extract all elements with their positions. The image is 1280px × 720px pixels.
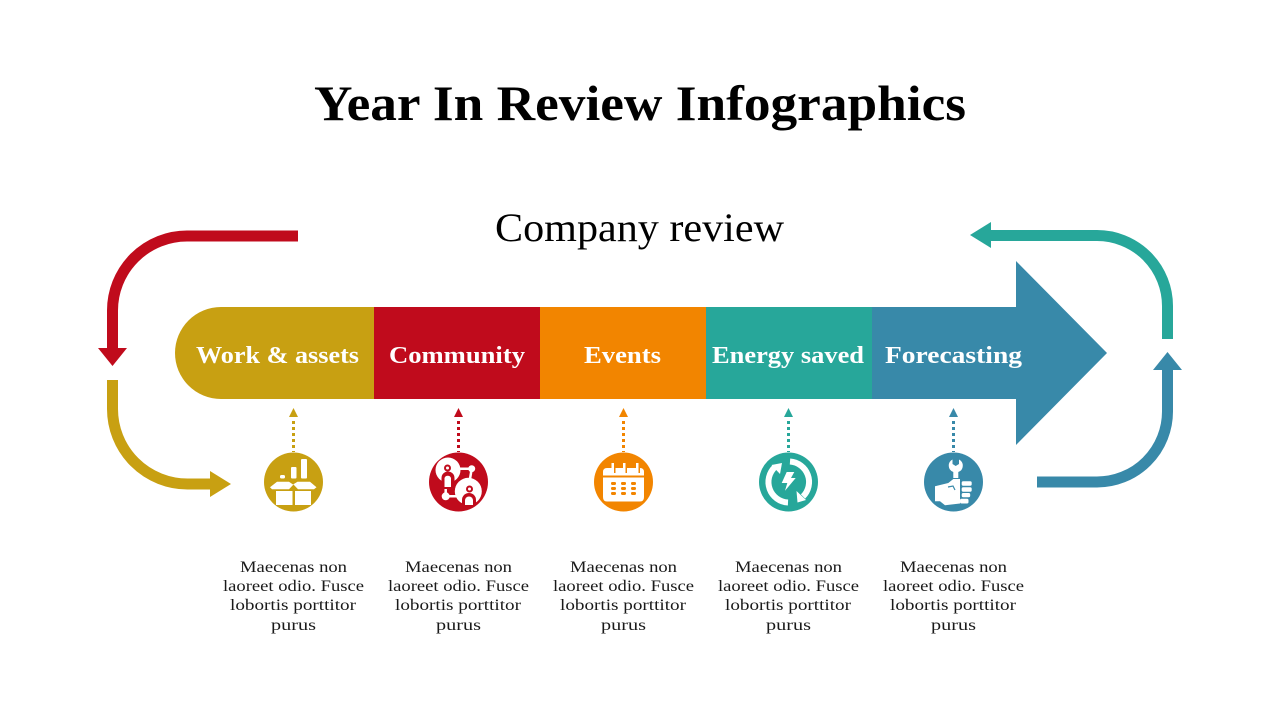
- text block: laoreet odio. Fusce: [553, 578, 694, 595]
- segment: forecasting arrow: Forecasting: [885, 342, 1023, 369]
- dotted arrow: [289, 408, 298, 452]
- icon: recycle energy: [759, 452, 818, 512]
- text block: purus: [931, 617, 976, 634]
- text block: laoreet odio. Fusce: [883, 578, 1024, 595]
- text block: laoreet odio. Fusce: [718, 578, 859, 595]
- segment: events: [540, 307, 706, 399]
- text block: purus: [766, 617, 811, 634]
- text block: lobortis porttitor: [395, 597, 522, 614]
- dotted arrow: [619, 408, 628, 452]
- text block: purus: [271, 617, 316, 634]
- text block: Maecenas non: [900, 559, 1007, 576]
- text block: [223, 559, 364, 634]
- dotted arrow: [949, 408, 958, 452]
- icon: calendar: [594, 452, 653, 512]
- icon: connected people: [429, 452, 488, 512]
- segment: energy saved: [706, 307, 872, 399]
- text block: [553, 559, 694, 634]
- text block: [388, 559, 529, 634]
- segment: energy saved: Energy saved: [712, 342, 864, 369]
- column: work and assets: [223, 408, 364, 634]
- arrow: teal loop: [970, 222, 1168, 339]
- segment: work and assets: Work & assets: [196, 342, 359, 369]
- main arrow banner: [175, 261, 1107, 445]
- dotted arrow: [454, 408, 463, 452]
- text block: [718, 559, 859, 634]
- icon: box with bars: [264, 452, 323, 512]
- arrow: blue loop: [1037, 352, 1182, 482]
- text block: lobortis porttitor: [725, 597, 852, 614]
- text block: laoreet odio. Fusce: [388, 578, 529, 595]
- segment: events: Events: [584, 342, 661, 369]
- arrow: red loop: [98, 236, 298, 366]
- title: Year In Review Infographics: [314, 75, 966, 131]
- dotted arrow: [784, 408, 793, 452]
- subtitle: company review: Company review: [495, 205, 784, 250]
- text block: lobortis porttitor: [230, 597, 357, 614]
- text block: [883, 559, 1024, 634]
- column: events: [553, 408, 694, 634]
- segment: community: [374, 307, 540, 399]
- segment: work and assets: [175, 307, 374, 399]
- text block: lobortis porttitor: [560, 597, 687, 614]
- text block: Maecenas non: [240, 559, 347, 576]
- icon: hand with wrench: [924, 452, 983, 512]
- column: energy saved: [718, 408, 859, 634]
- segment: community: Community: [389, 342, 526, 369]
- segment: forecasting arrow: [872, 261, 1107, 445]
- text block: purus: [601, 617, 646, 634]
- column: forecasting: [883, 408, 1024, 634]
- text block: Maecenas non: [735, 559, 842, 576]
- text block: purus: [436, 617, 481, 634]
- text block: Maecenas non: [570, 559, 677, 576]
- text block: lobortis porttitor: [890, 597, 1017, 614]
- column: community: [388, 408, 529, 634]
- arrow: gold loop: [112, 380, 231, 497]
- text block: laoreet odio. Fusce: [223, 578, 364, 595]
- text block: Maecenas non: [405, 559, 512, 576]
